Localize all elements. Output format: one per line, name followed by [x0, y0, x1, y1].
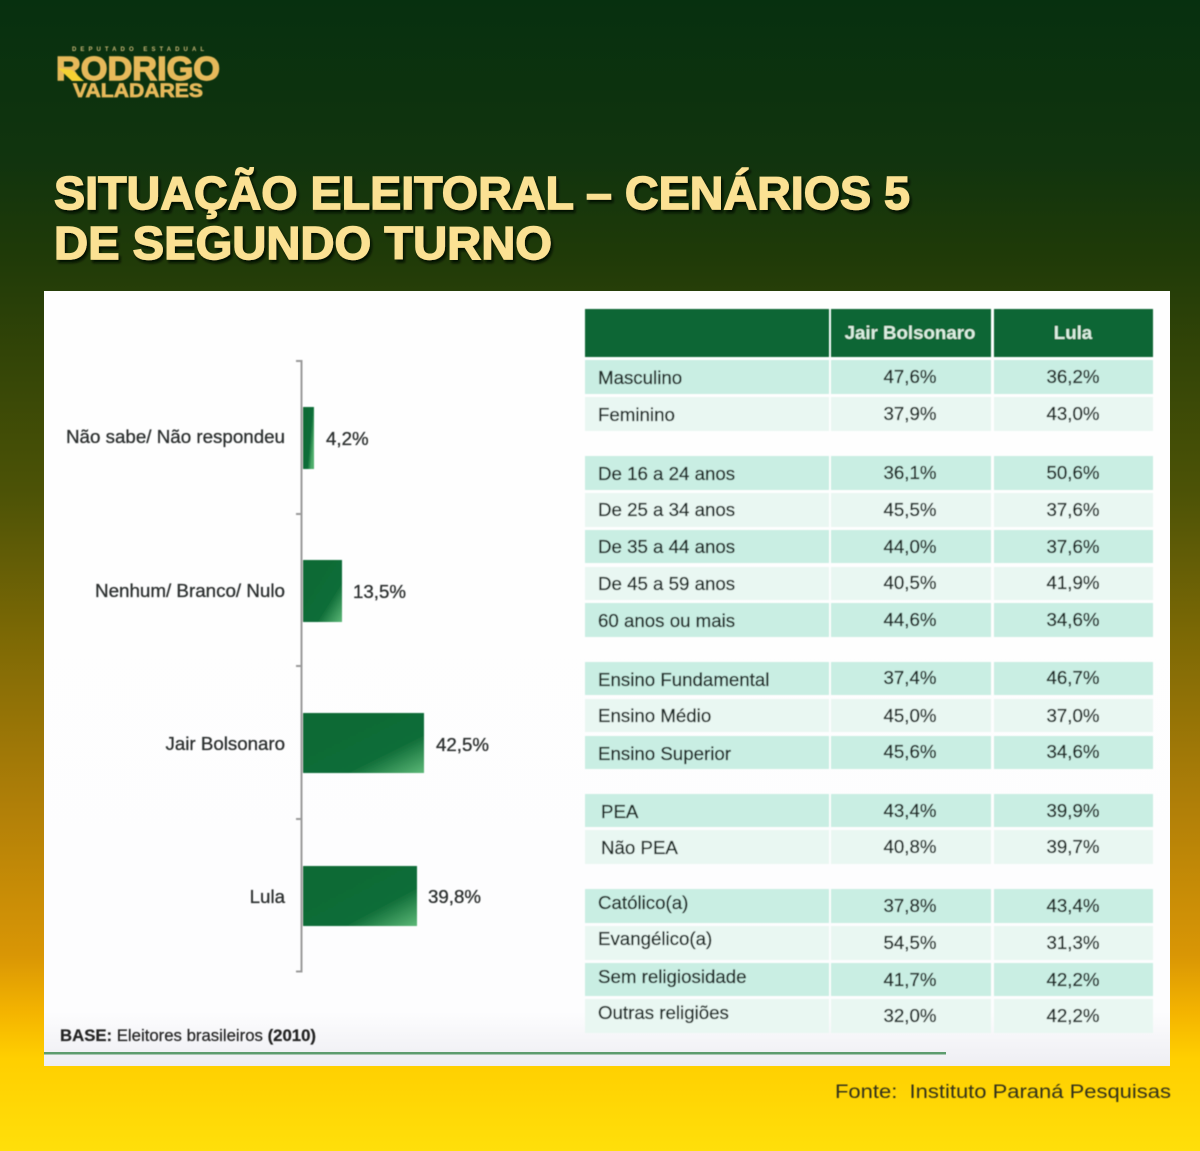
table group: age: 37,6%: [1046, 499, 1100, 520]
table group: religion: Evangélico(a): [598, 928, 712, 949]
table group: gender: 47,6%: [884, 366, 936, 387]
bar chart: voting intention: Nenhum/ Branco/ Nulo: [95, 580, 285, 601]
table group: gender: 36,2%: [1046, 366, 1100, 387]
table group: age: De 35 a 44 anos: [598, 536, 735, 557]
table group: age: De 16 a 24 anos: [598, 463, 735, 484]
table group: economic activity: 39,7%: [1046, 836, 1100, 857]
table group: education: 37,0%: [1046, 705, 1100, 726]
table group: age: 44,0%: [884, 536, 936, 557]
table group: economic activity: PEA: [601, 801, 639, 822]
table group: age: De 45 a 59 anos: [598, 573, 735, 594]
logo: Rodrigo Valadares: RODRIGO: [56, 50, 220, 87]
table group: education: 45,0%: [884, 705, 936, 726]
table group: economic activity: Não PEA: [601, 837, 678, 858]
source note: Fonte: Instituto Paraná Pesquisas: [835, 1082, 1171, 1103]
table group: education: [585, 662, 1153, 769]
table group: economic activity: 40,8%: [884, 836, 936, 857]
bar chart: voting intention: Lula: [250, 886, 286, 907]
table: results by demographic: [585, 309, 1153, 1033]
bar chart: voting intention: Não sabe/ Não respondeu: [66, 426, 285, 447]
logo: Rodrigo Valadares: VALADARES: [73, 81, 203, 102]
table group: gender: 43,0%: [1046, 403, 1100, 424]
title: [54, 167, 910, 269]
table group: education: Ensino Médio: [598, 705, 711, 726]
table group: religion: 43,4%: [1046, 895, 1100, 916]
table group: religion: Sem religiosidade: [598, 966, 747, 987]
table group: religion: Outras religiões: [598, 1002, 729, 1023]
table group: age: 60 anos ou mais: [598, 610, 735, 631]
table group: economic activity: 43,4%: [884, 800, 936, 821]
table header: Lula: [1054, 322, 1093, 343]
table group: religion: 42,2%: [1046, 1005, 1100, 1026]
table group: gender: Masculino: [598, 367, 682, 388]
table group: economic activity: [585, 794, 1153, 864]
bar chart: voting intention: 42,5%: [436, 734, 489, 755]
table group: gender: [585, 360, 1153, 431]
table group: gender: Feminino: [598, 404, 675, 425]
table group: age: 50,6%: [1046, 462, 1100, 483]
panel: white chart and table card: [44, 291, 1170, 1066]
table group: education: Ensino Fundamental: [598, 669, 769, 690]
logo: Rodrigo Valadares: [56, 47, 220, 102]
bar chart: voting intention: [66, 361, 489, 972]
table group: age: 41,9%: [1046, 572, 1100, 593]
table group: age: De 25 a 34 anos: [598, 499, 735, 520]
table group: education: 45,6%: [884, 741, 936, 762]
table group: religion: 37,8%: [884, 895, 936, 916]
title: DE SEGUNDO TURNO: [54, 217, 552, 269]
base note: BASE: Eleitores brasileiros (2010): [60, 1026, 316, 1045]
table group: religion: 31,3%: [1046, 932, 1100, 953]
table group: education: Ensino Superior: [598, 743, 731, 764]
bar chart: voting intention: 4,2%: [326, 428, 369, 449]
table group: education: 34,6%: [1046, 741, 1100, 762]
table group: education: 37,4%: [884, 667, 936, 688]
table group: education: 46,7%: [1046, 667, 1100, 688]
logo: Rodrigo Valadares: DEPUTADO ESTADUAL: [72, 47, 204, 53]
table group: religion: Católico(a): [598, 892, 688, 913]
table group: age: 36,1%: [884, 462, 936, 483]
bar chart: voting intention: 39,8%: [428, 886, 481, 907]
table group: religion: 42,2%: [1046, 969, 1100, 990]
table group: age: [585, 456, 1153, 637]
table header: [585, 309, 1153, 357]
table group: religion: 32,0%: [884, 1005, 936, 1026]
bar chart: voting intention: Jair Bolsonaro: [166, 733, 285, 754]
footer rule: [44, 1052, 946, 1054]
table header: Jair Bolsonaro: [845, 322, 975, 343]
table group: age: 37,6%: [1046, 536, 1100, 557]
table group: age: 34,6%: [1046, 609, 1100, 630]
table group: economic activity: 39,9%: [1046, 800, 1100, 821]
table group: religion: [585, 889, 1153, 1033]
table group: religion: 41,7%: [884, 969, 936, 990]
title: SITUAÇÃO ELEITORAL – CENÁRIOS 5: [54, 167, 910, 219]
table group: religion: 54,5%: [884, 932, 936, 953]
table group: gender: 37,9%: [884, 403, 936, 424]
table group: age: 45,5%: [884, 499, 936, 520]
table group: age: 40,5%: [884, 572, 936, 593]
bar chart: voting intention: 13,5%: [353, 581, 406, 602]
table group: age: 44,6%: [884, 609, 936, 630]
